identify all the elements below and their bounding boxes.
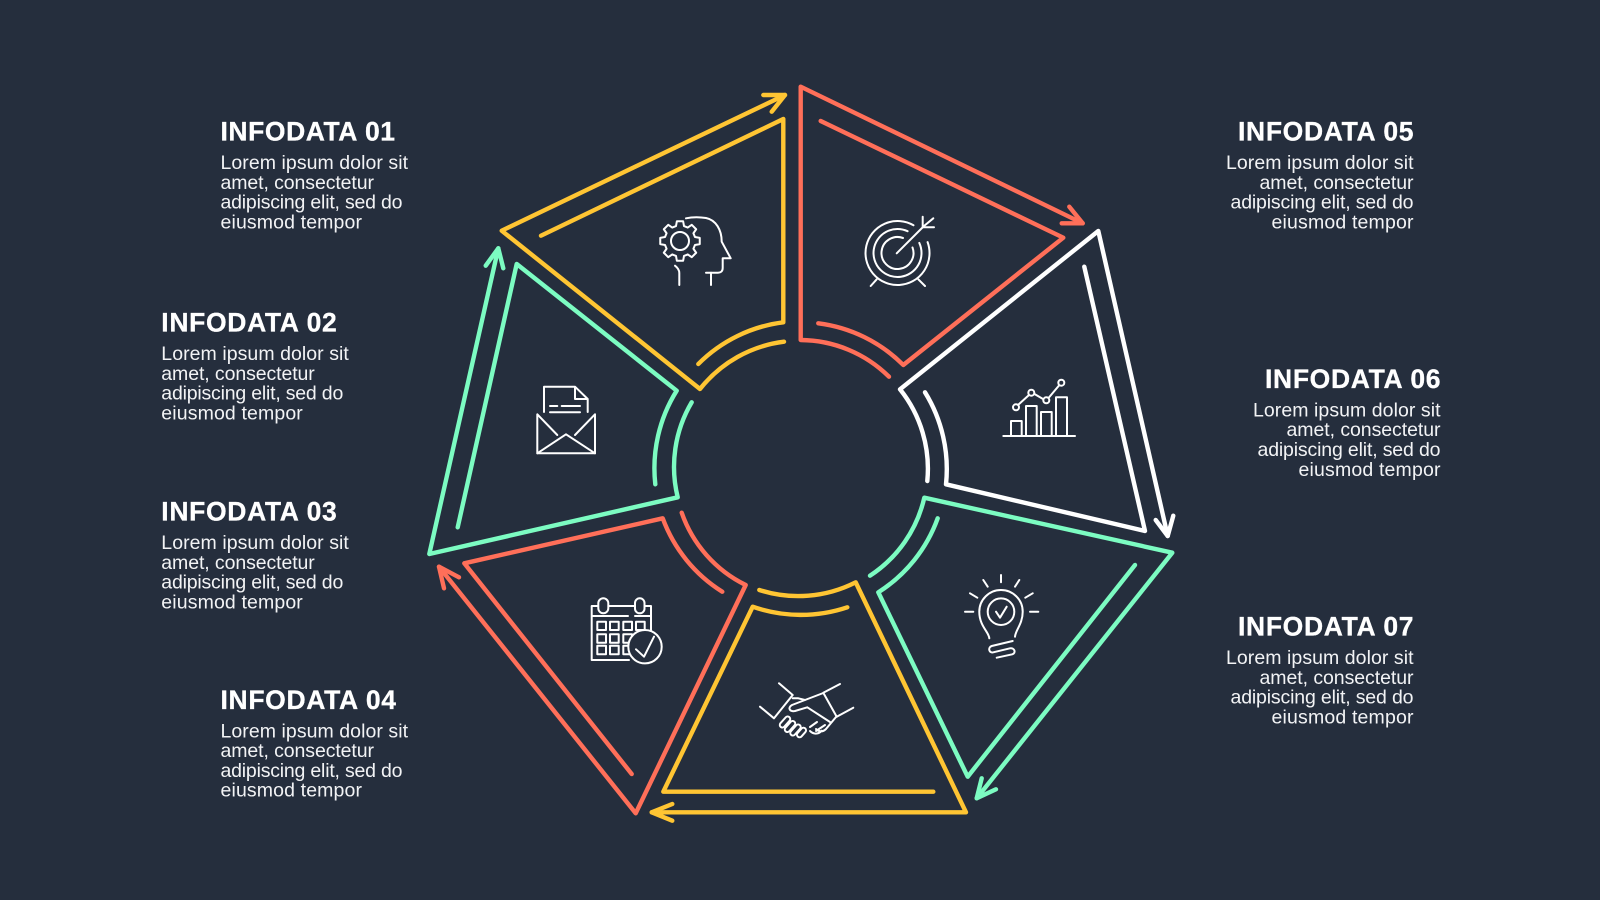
segment bottom: yellow arrow outline <box>652 582 966 821</box>
text block: INFODATA 02 <box>161 308 349 424</box>
text block: INFODATA 07: adipiscing elit, sed do <box>1230 687 1414 709</box>
text block: INFODATA 03: adipiscing elit, sed do <box>161 572 343 594</box>
text block: INFODATA 03: amet, consectetur <box>161 552 315 574</box>
segment 03: red arrow outline <box>439 513 746 813</box>
text block: INFODATA 04: Lorem ipsum dolor sit <box>220 720 409 742</box>
text block: INFODATA 01 <box>220 117 409 233</box>
text block: INFODATA 02: INFODATA 02 <box>161 308 337 338</box>
text block: INFODATA 07 <box>1226 612 1414 728</box>
text block: INFODATA 05 <box>1226 117 1414 233</box>
text block: INFODATA 01: Lorem ipsum dolor sit <box>220 152 409 174</box>
text block: INFODATA 02: eiusmod tempor <box>161 402 303 424</box>
text block: INFODATA 06 <box>1253 364 1441 481</box>
text block: INFODATA 07: eiusmod tempor <box>1272 706 1414 728</box>
segment 06: white arrow outline <box>900 231 1173 536</box>
text block: INFODATA 01: adipiscing elit, sed do <box>220 192 403 214</box>
text block: INFODATA 06: INFODATA 06 <box>1265 364 1440 394</box>
text block: INFODATA 05: Lorem ipsum dolor sit <box>1226 152 1414 174</box>
text block: INFODATA 06: Lorem ipsum dolor sit <box>1253 399 1441 421</box>
text block: INFODATA 03: Lorem ipsum dolor sit <box>161 532 349 554</box>
icon: calendar with check <box>592 598 662 663</box>
text block: INFODATA 07: Lorem ipsum dolor sit <box>1226 647 1414 669</box>
text block: INFODATA 02: adipiscing elit, sed do <box>161 383 343 405</box>
text block: INFODATA 03 <box>161 497 349 613</box>
text block: INFODATA 04: adipiscing elit, sed do <box>220 760 403 782</box>
segment 05: red arrow outline <box>801 87 1083 377</box>
icon: envelope with document <box>537 387 595 453</box>
text block: INFODATA 06: amet, consectetur <box>1286 419 1441 441</box>
text block: INFODATA 05: eiusmod tempor <box>1272 211 1414 233</box>
text block: INFODATA 06: adipiscing elit, sed do <box>1258 439 1441 461</box>
icon: head with gear <box>660 217 731 285</box>
icon: handshake <box>760 683 853 738</box>
text block: INFODATA 05: amet, consectetur <box>1260 172 1414 194</box>
icon: target with arrow <box>866 217 934 286</box>
text block: INFODATA 01: amet, consectetur <box>220 172 374 194</box>
text block: INFODATA 03: INFODATA 03 <box>161 497 337 527</box>
text block: INFODATA 02: Lorem ipsum dolor sit <box>161 343 349 365</box>
text block: INFODATA 04: eiusmod tempor <box>220 780 362 802</box>
text block: INFODATA 06: eiusmod tempor <box>1298 459 1441 481</box>
text block: INFODATA 05: adipiscing elit, sed do <box>1230 192 1414 214</box>
icon: light bulb with check <box>965 575 1038 658</box>
segment 07: green arrow outline <box>870 498 1172 798</box>
text block: INFODATA 03: eiusmod tempor <box>161 591 303 613</box>
text block: INFODATA 07: amet, consectetur <box>1260 667 1414 689</box>
text block: INFODATA 01: INFODATA 01 <box>220 117 395 147</box>
text block: INFODATA 04: INFODATA 04 <box>220 685 396 715</box>
text block: INFODATA 04 <box>220 685 409 802</box>
text block: INFODATA 02: amet, consectetur <box>161 363 315 385</box>
segment 01: yellow arrow outline <box>502 95 785 389</box>
text block: INFODATA 04: amet, consectetur <box>220 740 374 762</box>
text block: INFODATA 01: eiusmod tempor <box>220 211 362 233</box>
icon: bar chart with trend line <box>1003 380 1075 436</box>
segment 02: green arrow outline <box>429 248 692 554</box>
text block: INFODATA 07: INFODATA 07 <box>1238 612 1414 642</box>
text block: INFODATA 05: INFODATA 05 <box>1238 117 1414 147</box>
